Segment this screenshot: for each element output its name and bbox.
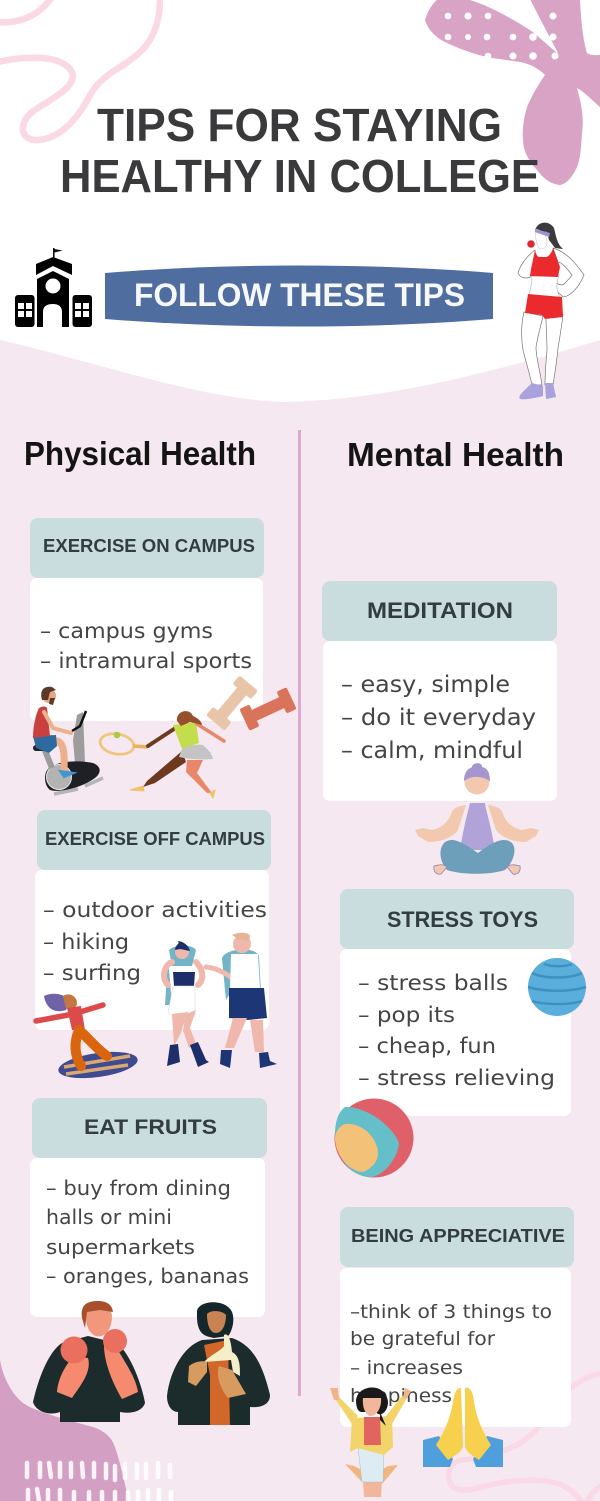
decoration: top-left squiggle: [0, 0, 160, 140]
panel: eat fruits: EAT FRUITS: [84, 1116, 217, 1139]
panel: exercise on campus: – campus gyms: [40, 619, 213, 643]
panel: eat fruits: – oranges, bananas: [46, 1264, 249, 1288]
panel: exercise off campus: – outdoor activities: [43, 898, 267, 922]
panel: eat fruits: supermarkets: [46, 1235, 195, 1259]
panel: meditation: [322, 581, 557, 801]
icon: jumping woman: [330, 1388, 411, 1497]
panel: being appreciative: BEING APPRECIATIVE: [351, 1225, 565, 1246]
panel: stress toys: [340, 889, 574, 1116]
icon: colourful stress ball: [334, 1098, 414, 1178]
icon: hikers: [164, 933, 277, 1068]
decoration: top-right flower: [425, 0, 600, 185]
decoration: bottom-left blob: [0, 1360, 171, 1501]
panel: meditation: – calm, mindful: [341, 736, 523, 764]
panel: being appreciative: –think of 3 things to: [350, 1301, 552, 1323]
title: HEALTHY IN COLLEGE: [60, 150, 540, 202]
heading: physical health: Physical Health: [24, 435, 256, 472]
icon: meditating woman: [415, 763, 539, 874]
panel: being appreciative: be grateful for: [350, 1328, 495, 1350]
icon: salmon dumbbell: [239, 687, 297, 731]
panel: exercise on campus: – intramural sports: [40, 649, 252, 673]
heading: mental health: Mental Health: [347, 436, 564, 473]
panel: eat fruits: – buy from dining: [46, 1176, 231, 1200]
icon: athlete eating an apple: [518, 223, 584, 399]
panel: exercise off campus: EXERCISE OFF CAMPUS: [45, 829, 265, 849]
icon: person eating apples: [33, 1301, 145, 1422]
panel: meditation: – do it everyday: [341, 703, 536, 731]
icon: school building: [15, 248, 92, 327]
title: [60, 99, 540, 202]
panel: eat fruits: [30, 1098, 267, 1317]
panel: exercise on campus: EXERCISE ON CAMPUS: [43, 536, 255, 556]
panel: exercise on campus: [30, 518, 264, 721]
panel: being appreciative: [340, 1207, 574, 1427]
panel: exercise off campus: – hiking: [43, 930, 129, 954]
panel: meditation: – easy, simple: [341, 670, 510, 698]
panel: exercise off campus: – surfing: [43, 961, 141, 985]
icon: praying hands: [423, 1388, 503, 1467]
panel: being appreciative: – increases: [350, 1357, 463, 1379]
panel: stress toys: – pop its: [358, 1003, 455, 1027]
decoration: bottom-right squiggle: [449, 1373, 600, 1501]
panel: eat fruits: halls or mini: [46, 1205, 172, 1229]
panel: meditation: MEDITATION: [367, 598, 513, 623]
panel: stress toys: – stress relieving: [358, 1066, 555, 1090]
panel: exercise off campus: [35, 810, 271, 1030]
icon: person peeling banana: [167, 1302, 270, 1425]
divider: [298, 430, 301, 1396]
banner: follow these tips: FOLLOW THESE TIPS: [134, 277, 465, 313]
panel: stress toys: STRESS TOYS: [387, 907, 538, 932]
icon: exercise bike rider: [33, 687, 103, 794]
panel: stress toys: – stress balls: [358, 971, 508, 995]
panel: being appreciative: happiness: [350, 1385, 452, 1407]
icon: tennis player: [99, 711, 224, 798]
panel: stress toys: – cheap, fun: [358, 1034, 496, 1058]
background wave: [0, 340, 600, 1501]
icon: beige dumbbell: [206, 675, 258, 731]
banner: follow these tips: [105, 266, 493, 326]
icon: surfer: [36, 994, 139, 1082]
icon: blue stress ball: [528, 958, 586, 1016]
title: TIPS FOR STAYING: [97, 99, 502, 151]
